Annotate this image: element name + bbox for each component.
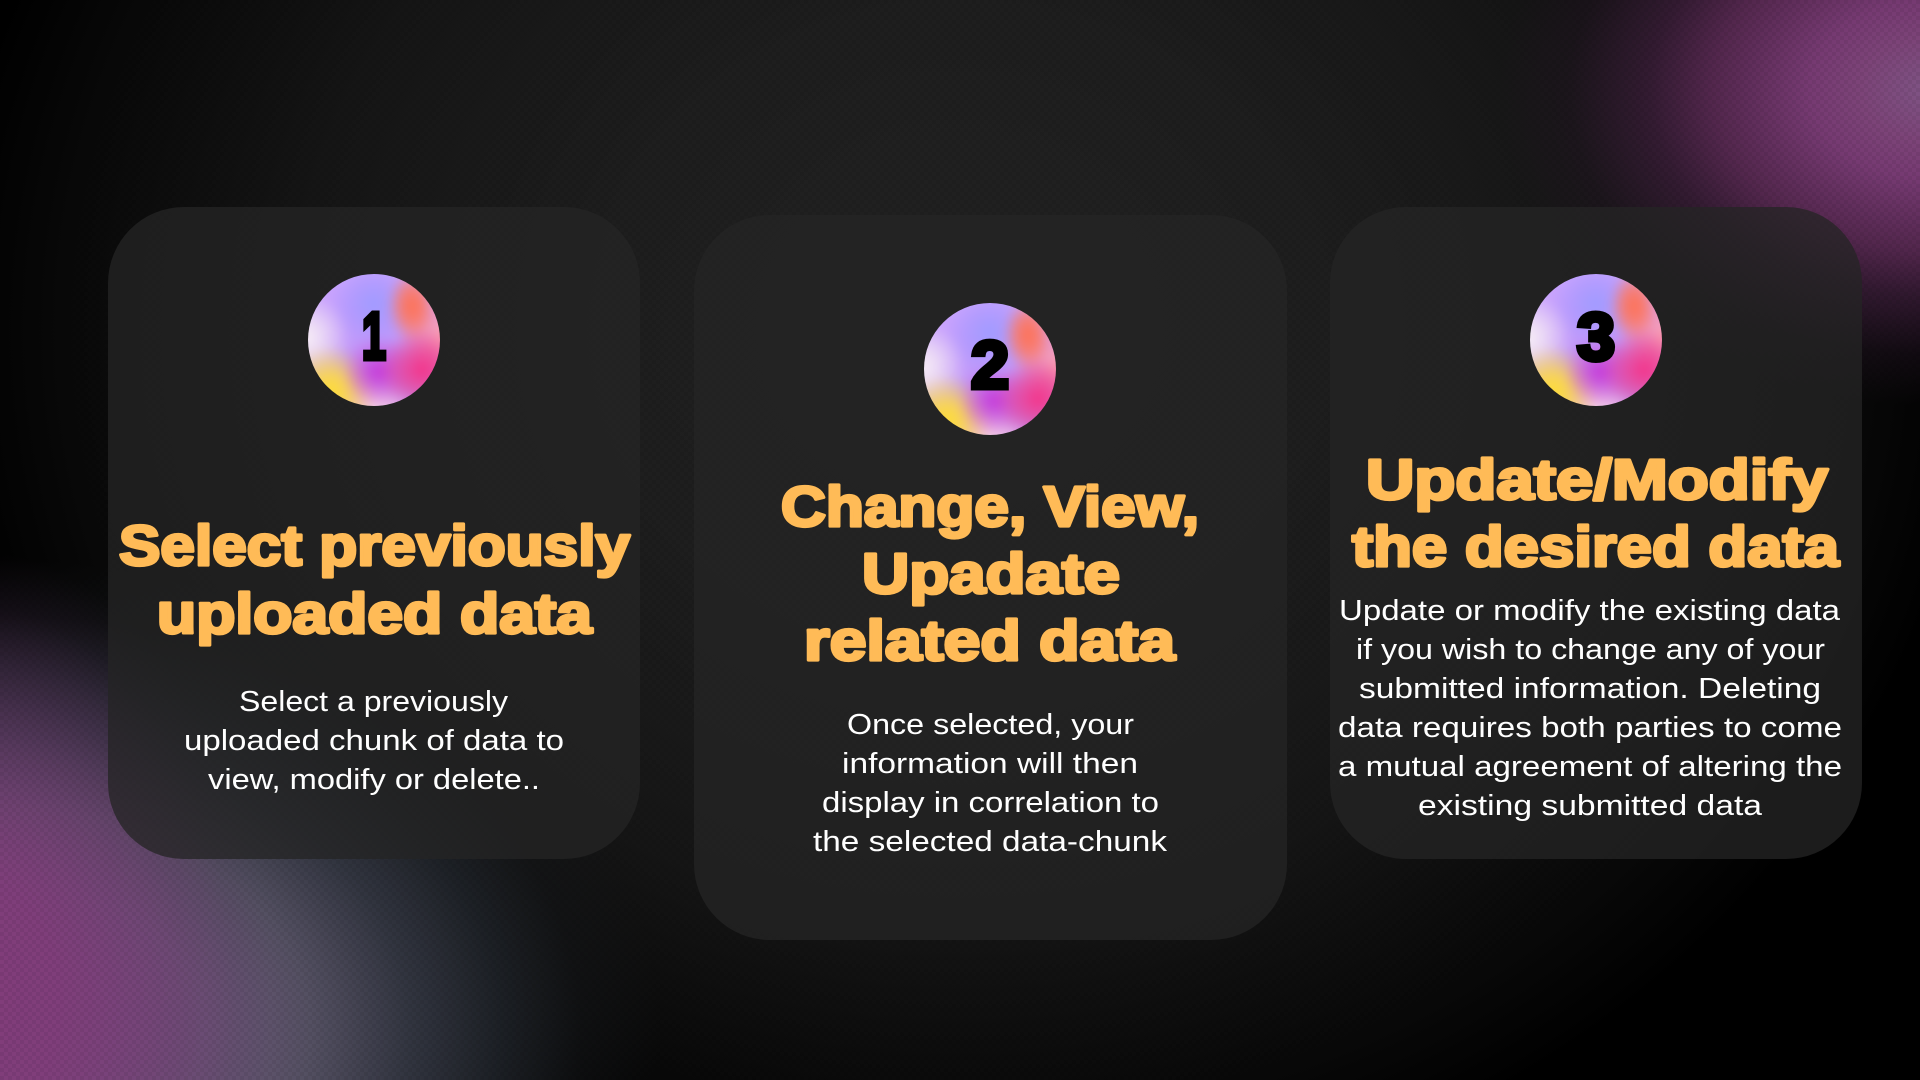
body text: step 3 description: Update or modify the existing data bbox=[1339, 595, 1841, 627]
body text: step 3 description: a mutual agreement of altering the bbox=[1338, 751, 1842, 783]
number 2: 2 bbox=[971, 328, 1009, 403]
heading: select previously uploaded data: Select previously bbox=[119, 514, 630, 578]
body text: step 2 description: display in correlation to bbox=[822, 787, 1159, 819]
icon: number badge 2 bbox=[924, 303, 1056, 435]
body text: step 3 description: if you wish to change any of your bbox=[1356, 634, 1825, 666]
body text: step 1 description: Select a previously bbox=[239, 686, 509, 718]
heading: change, view, upadate related data: related data bbox=[804, 609, 1176, 673]
heading: update/modify the desired data: the desired data bbox=[1352, 515, 1840, 579]
heading: update/modify the desired data bbox=[1351, 448, 1842, 579]
heading: change, view, upadate related data: Upadate bbox=[862, 542, 1120, 606]
heading: change, view, upadate related data bbox=[781, 475, 1199, 673]
body text: step 2 description: the selected data-chunk bbox=[813, 826, 1168, 858]
body text: step 1 description: uploaded chunk of data to bbox=[184, 725, 564, 757]
heading: select previously uploaded data bbox=[119, 514, 632, 647]
body text: step 2 description: information will then bbox=[842, 748, 1138, 780]
body text: step 1 description: view, modify or delete.. bbox=[208, 764, 540, 796]
heading: change, view, upadate related data: Change, View, bbox=[781, 475, 1199, 539]
icon: number badge 3 bbox=[1530, 274, 1662, 406]
body text: step 2 description: Once selected, your bbox=[847, 709, 1134, 741]
heading: update/modify the desired data: Update/Modify bbox=[1366, 448, 1828, 512]
body text: step 3 description bbox=[1338, 595, 1842, 822]
icon: number badge 1 bbox=[308, 274, 440, 406]
body text: step 1 description bbox=[184, 686, 564, 796]
heading: select previously uploaded data: uploaded data bbox=[157, 582, 593, 646]
number 1: 1 bbox=[362, 299, 386, 374]
panel: step 3 update or modify bbox=[1330, 207, 1862, 859]
body text: step 3 description: submitted information. Deleting bbox=[1359, 673, 1821, 705]
body text: step 3 description: existing submitted data bbox=[1418, 790, 1763, 822]
body text: step 2 description bbox=[813, 709, 1168, 858]
body text: step 3 description: data requires both parties to come bbox=[1338, 712, 1842, 744]
panel: step 1 select data bbox=[108, 207, 640, 859]
panel: step 2 change view update bbox=[694, 215, 1287, 940]
number 3: 3 bbox=[1577, 300, 1615, 375]
